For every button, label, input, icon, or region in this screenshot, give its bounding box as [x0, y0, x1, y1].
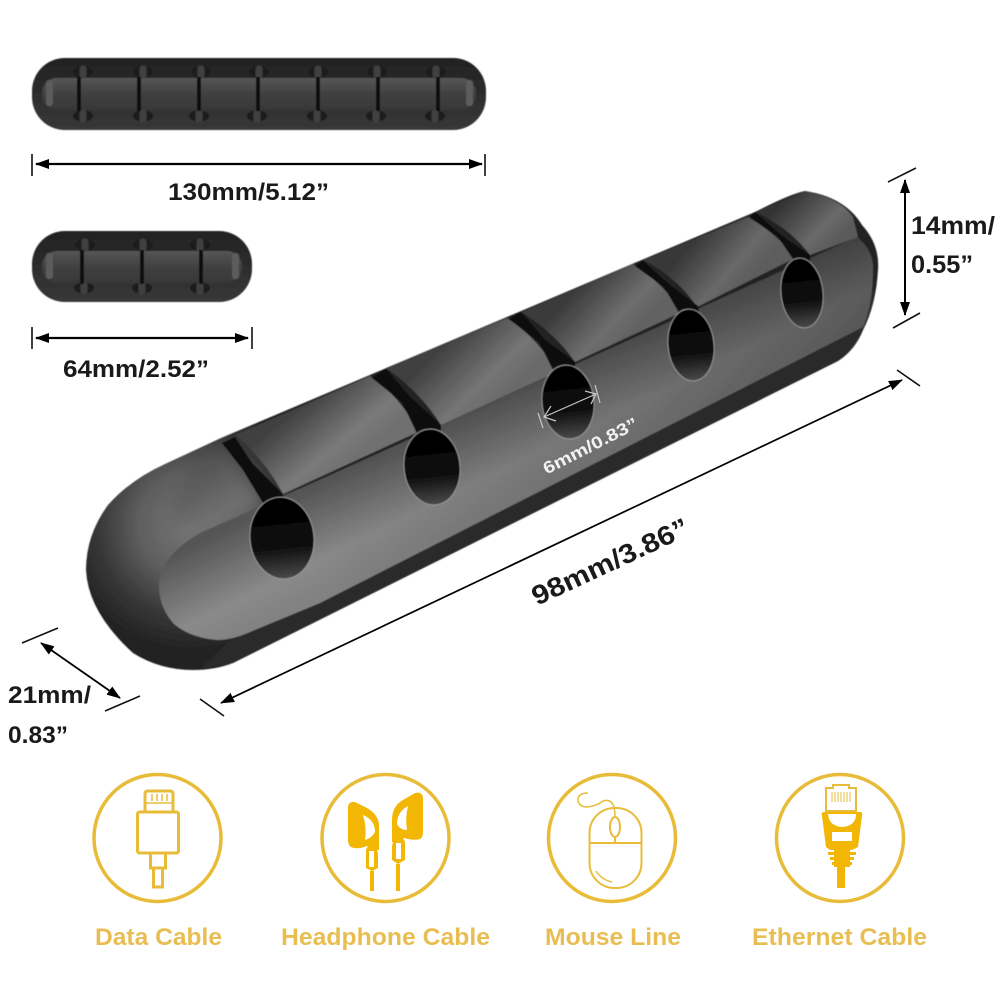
clip front face — [159, 237, 873, 640]
left cap top highlight — [175, 438, 262, 526]
icon: data cable — [94, 774, 221, 902]
block 5: end cap — [755, 191, 858, 255]
label: Mouse Line: Mouse Line — [545, 924, 681, 951]
label: Headphone Cable: Headphone Cable — [281, 924, 490, 951]
label: 64mm/2.52": 64mm/2.52” — [63, 356, 209, 383]
dimension: 64mm width arrow — [32, 327, 252, 349]
label: 6mm/0.83": 6mm/0.83” — [540, 414, 641, 478]
clip outer shell — [86, 191, 878, 670]
label: 98mm/3.86": 98mm/3.86” — [527, 512, 694, 611]
right stem — [392, 838, 405, 891]
slots — [222, 212, 810, 505]
label: Ethernet Cable: Ethernet Cable — [752, 924, 927, 951]
icon: ethernet cable — [776, 774, 904, 902]
block 3 — [521, 264, 682, 362]
dimension: 130mm width arrow — [32, 154, 485, 176]
label: Data Cable: Data Cable — [95, 924, 222, 951]
icon: mouse line — [548, 774, 676, 902]
holes — [246, 256, 827, 582]
block 4 — [643, 217, 795, 307]
dimension: 21mm depth arrow — [22, 628, 140, 711]
dimension: 98mm length arrow — [200, 370, 920, 716]
left earbud — [348, 802, 379, 850]
product top view: 7-slot clip — [32, 58, 486, 130]
icon: headphone cable — [322, 774, 449, 902]
clip bottom side band — [200, 290, 875, 669]
right earbud — [392, 793, 423, 842]
label: 130mm/5.12": 130mm/5.12” — [168, 179, 329, 206]
label: 21mm/0.83": 0.83” — [8, 722, 68, 749]
product top view: 3-slot clip — [32, 231, 252, 302]
main product: 5-slot cable clip — [86, 191, 878, 670]
hole dimension arrow — [538, 385, 600, 428]
label: 14mm/0.55": 14mm/ — [911, 212, 995, 240]
label: 21mm/0.83": 21mm/ — [8, 682, 91, 709]
label: 14mm/0.55": 0.55” — [911, 251, 973, 279]
block 1 — [235, 376, 418, 494]
left stem — [366, 846, 378, 891]
dimension: 14mm height arrow — [888, 168, 920, 328]
face shading toward the right end — [159, 237, 873, 640]
block 2 — [386, 318, 557, 425]
